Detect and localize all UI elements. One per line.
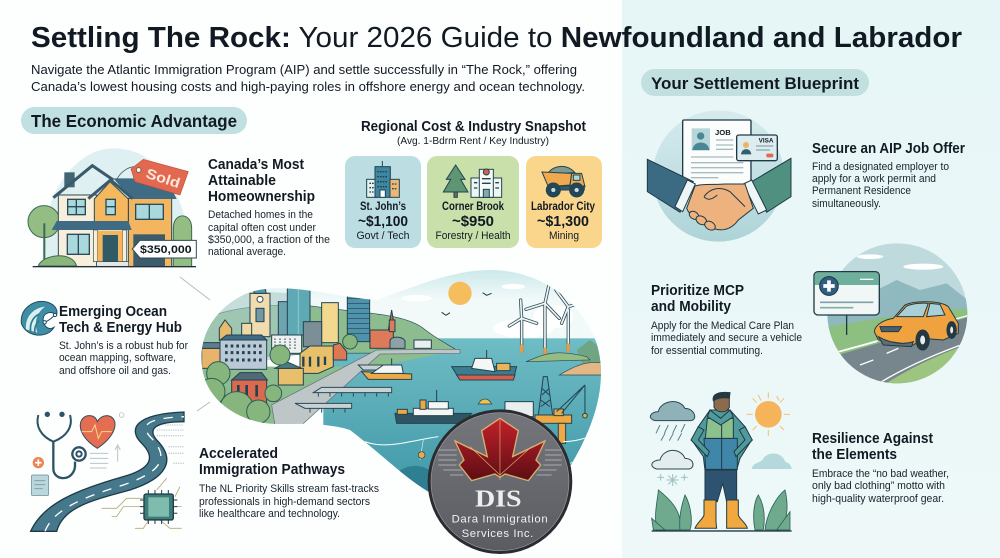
text block: accelerated immigration pathways: The NL Priority Skills stream fast-tracks [199,483,379,495]
text block: canada's most attainable homeownership [208,157,330,258]
logo: dara immigration services badge: Services Inc. [462,528,533,540]
panel: right settlement background [622,0,1000,558]
text block: prioritize mcp and mobility: and Mobility [651,299,731,315]
text block: secure an aip job offer: apply for a work permit and [812,173,936,185]
plants [652,490,790,530]
text block: accelerated immigration pathways: Accelerated [199,446,278,462]
text block: canada's most attainable homeownership: capital often cost under [208,222,316,234]
text block: secure an aip job offer [812,141,965,210]
text block: resilience against the elements [812,431,949,505]
icon: stethoscope [37,415,86,478]
icon: circuit chip [102,478,182,528]
road [31,412,184,531]
text block: prioritize mcp and mobility: immediately and secure a vehicle [651,332,802,344]
label: sold tag [131,159,188,195]
medical card sign [814,272,879,315]
illustration: health, road and chip [31,412,184,531]
text block: secure an aip job offer: Find a designated employer to [812,161,949,173]
logo: dara immigration services badge: DIS [475,487,522,513]
connector lines [180,277,210,411]
text block: prioritize mcp and mobility: for essential commuting. [651,345,763,357]
text block: canada's most attainable homeownership: national average. [208,246,286,258]
text block: canada's most attainable homeownership: $350,000, a fraction of the [208,234,330,246]
illustration: house [28,148,196,267]
fishing ship [452,350,517,380]
text block: resilience against the elements: the Elements [812,447,897,463]
turbines [508,284,574,355]
job document [683,120,751,192]
piers [295,365,392,413]
label: sold tag: Sold [144,165,182,191]
text block: canada's most attainable homeownership: Attainable [208,173,276,189]
orange car [874,302,958,350]
illustration: car on road with medical card [814,243,970,385]
text block: secure an aip job offer: Permanent Residence [812,185,911,197]
land under city [202,354,438,424]
heading: regional cost and industry snapshot [361,119,586,147]
heading: the economic advantage: The Economic Advantage [31,111,237,131]
card: labrador city: Mining [549,230,579,242]
icon: mining truck [542,166,585,197]
visa card [737,135,777,161]
icon: clipboard [31,457,49,496]
text block: emerging ocean tech and energy hub: Emerging Ocean [59,304,167,320]
text block: prioritize mcp and mobility: Prioritize MCP [651,283,744,299]
card: st. john's: Govt / Tech [356,230,410,242]
oil rig [505,377,587,443]
heading: regional cost and industry snapshot: Regional Cost & Industry Snapshot [361,119,586,135]
card: labrador city [526,156,602,248]
waves [365,436,586,446]
text block: emerging ocean tech and energy hub: ocean mapping, software, [59,352,176,364]
text block: resilience against the elements: high-quality waterproof gear. [812,493,944,505]
text block: canada's most attainable homeownership: Homeownership [208,189,315,205]
person [691,392,752,528]
heading: the economic advantage [21,107,247,134]
card: corner brook: ~$950 [452,213,494,230]
icon: tree and hospital [443,165,502,197]
heading: regional cost and industry snapshot: (Avg. 1-Bdrm Rent / Key Industry) [397,135,549,147]
icon: ocean wave and tech [21,301,57,335]
logo: dara immigration services badge: Dara Immigration [452,514,548,526]
sun [448,282,472,305]
card: st. john's [345,156,421,248]
text block: canada's most attainable homeownership: Canada’s Most [208,157,304,173]
yacht [362,358,412,379]
job document: JOB [715,128,731,137]
intro text: Navigate the Atlantic Immigration Program (AIP) and settle successfully in “The Rock,” offering [31,62,577,77]
text block: resilience against the elements: Resilience Against [812,431,933,447]
card: corner brook [427,156,519,248]
islands [526,353,590,362]
card: corner brook: Forestry / Health [436,230,510,242]
heading: your settlement blueprint [641,69,869,96]
logo: dara immigration services badge [428,409,572,554]
card: labrador city: Labrador City [531,201,596,213]
illustration: handshake, job offer and visa [647,110,791,242]
icon: city buildings [367,161,399,197]
heading: your settlement blueprint: Your Settlement Blueprint [651,74,859,93]
card: st. john's: ~$1,100 [358,213,408,230]
intro text [31,62,585,94]
intro text: Canada’s lowest housing costs and high-paying roles in offshore energy and ocean technology. [31,79,585,94]
text block: emerging ocean tech and energy hub [59,304,188,377]
hands [647,158,791,232]
illustration: harbour map of st. john's with wind turbines and oil rig [202,270,601,554]
sea [323,338,623,495]
icon: heart [80,416,115,448]
text block: emerging ocean tech and energy hub: Tech & Energy Hub [59,320,182,336]
text block: accelerated immigration pathways [199,446,379,520]
visa card: VISA [759,138,774,145]
title: Settling The Rock: Your 2026 Guide to Newfoundland and Labrador [31,22,962,54]
hill and far shore [190,305,460,360]
text block: resilience against the elements: only bad clothing” motto with [812,480,945,492]
city skyline [202,288,432,404]
card: labrador city: ~$1,300 [537,213,589,230]
text block: accelerated immigration pathways: Immigration Pathways [199,462,345,478]
text block: emerging ocean tech and energy hub: St. John’s is a robust hub for [59,340,188,352]
ferry [395,390,472,423]
text block: prioritize mcp and mobility [651,283,802,357]
weather icons [650,392,792,486]
text block: accelerated immigration pathways: like healthcare and technology. [199,508,340,520]
text block: accelerated immigration pathways: professionals in high-demand sectors [199,496,370,508]
illustration: person dressed for the weather [650,392,792,532]
card: st. john's: St. John’s [360,201,406,213]
text block: secure an aip job offer: simultaneously. [812,198,881,210]
card: corner brook: Corner Brook [442,201,505,213]
text block: resilience against the elements: Embrace the “no bad weather, [812,468,949,480]
label: price tag: $350,000 [140,244,192,256]
text block: secure an aip job offer: Secure an AIP Job Offer [812,141,965,157]
text block: prioritize mcp and mobility: Apply for the Medical Care Plan [651,320,794,332]
label: price tag [132,240,196,258]
text block: canada's most attainable homeownership: Detached homes in the [208,209,313,221]
text block: emerging ocean tech and energy hub: and offshore oil and gas. [59,365,171,377]
